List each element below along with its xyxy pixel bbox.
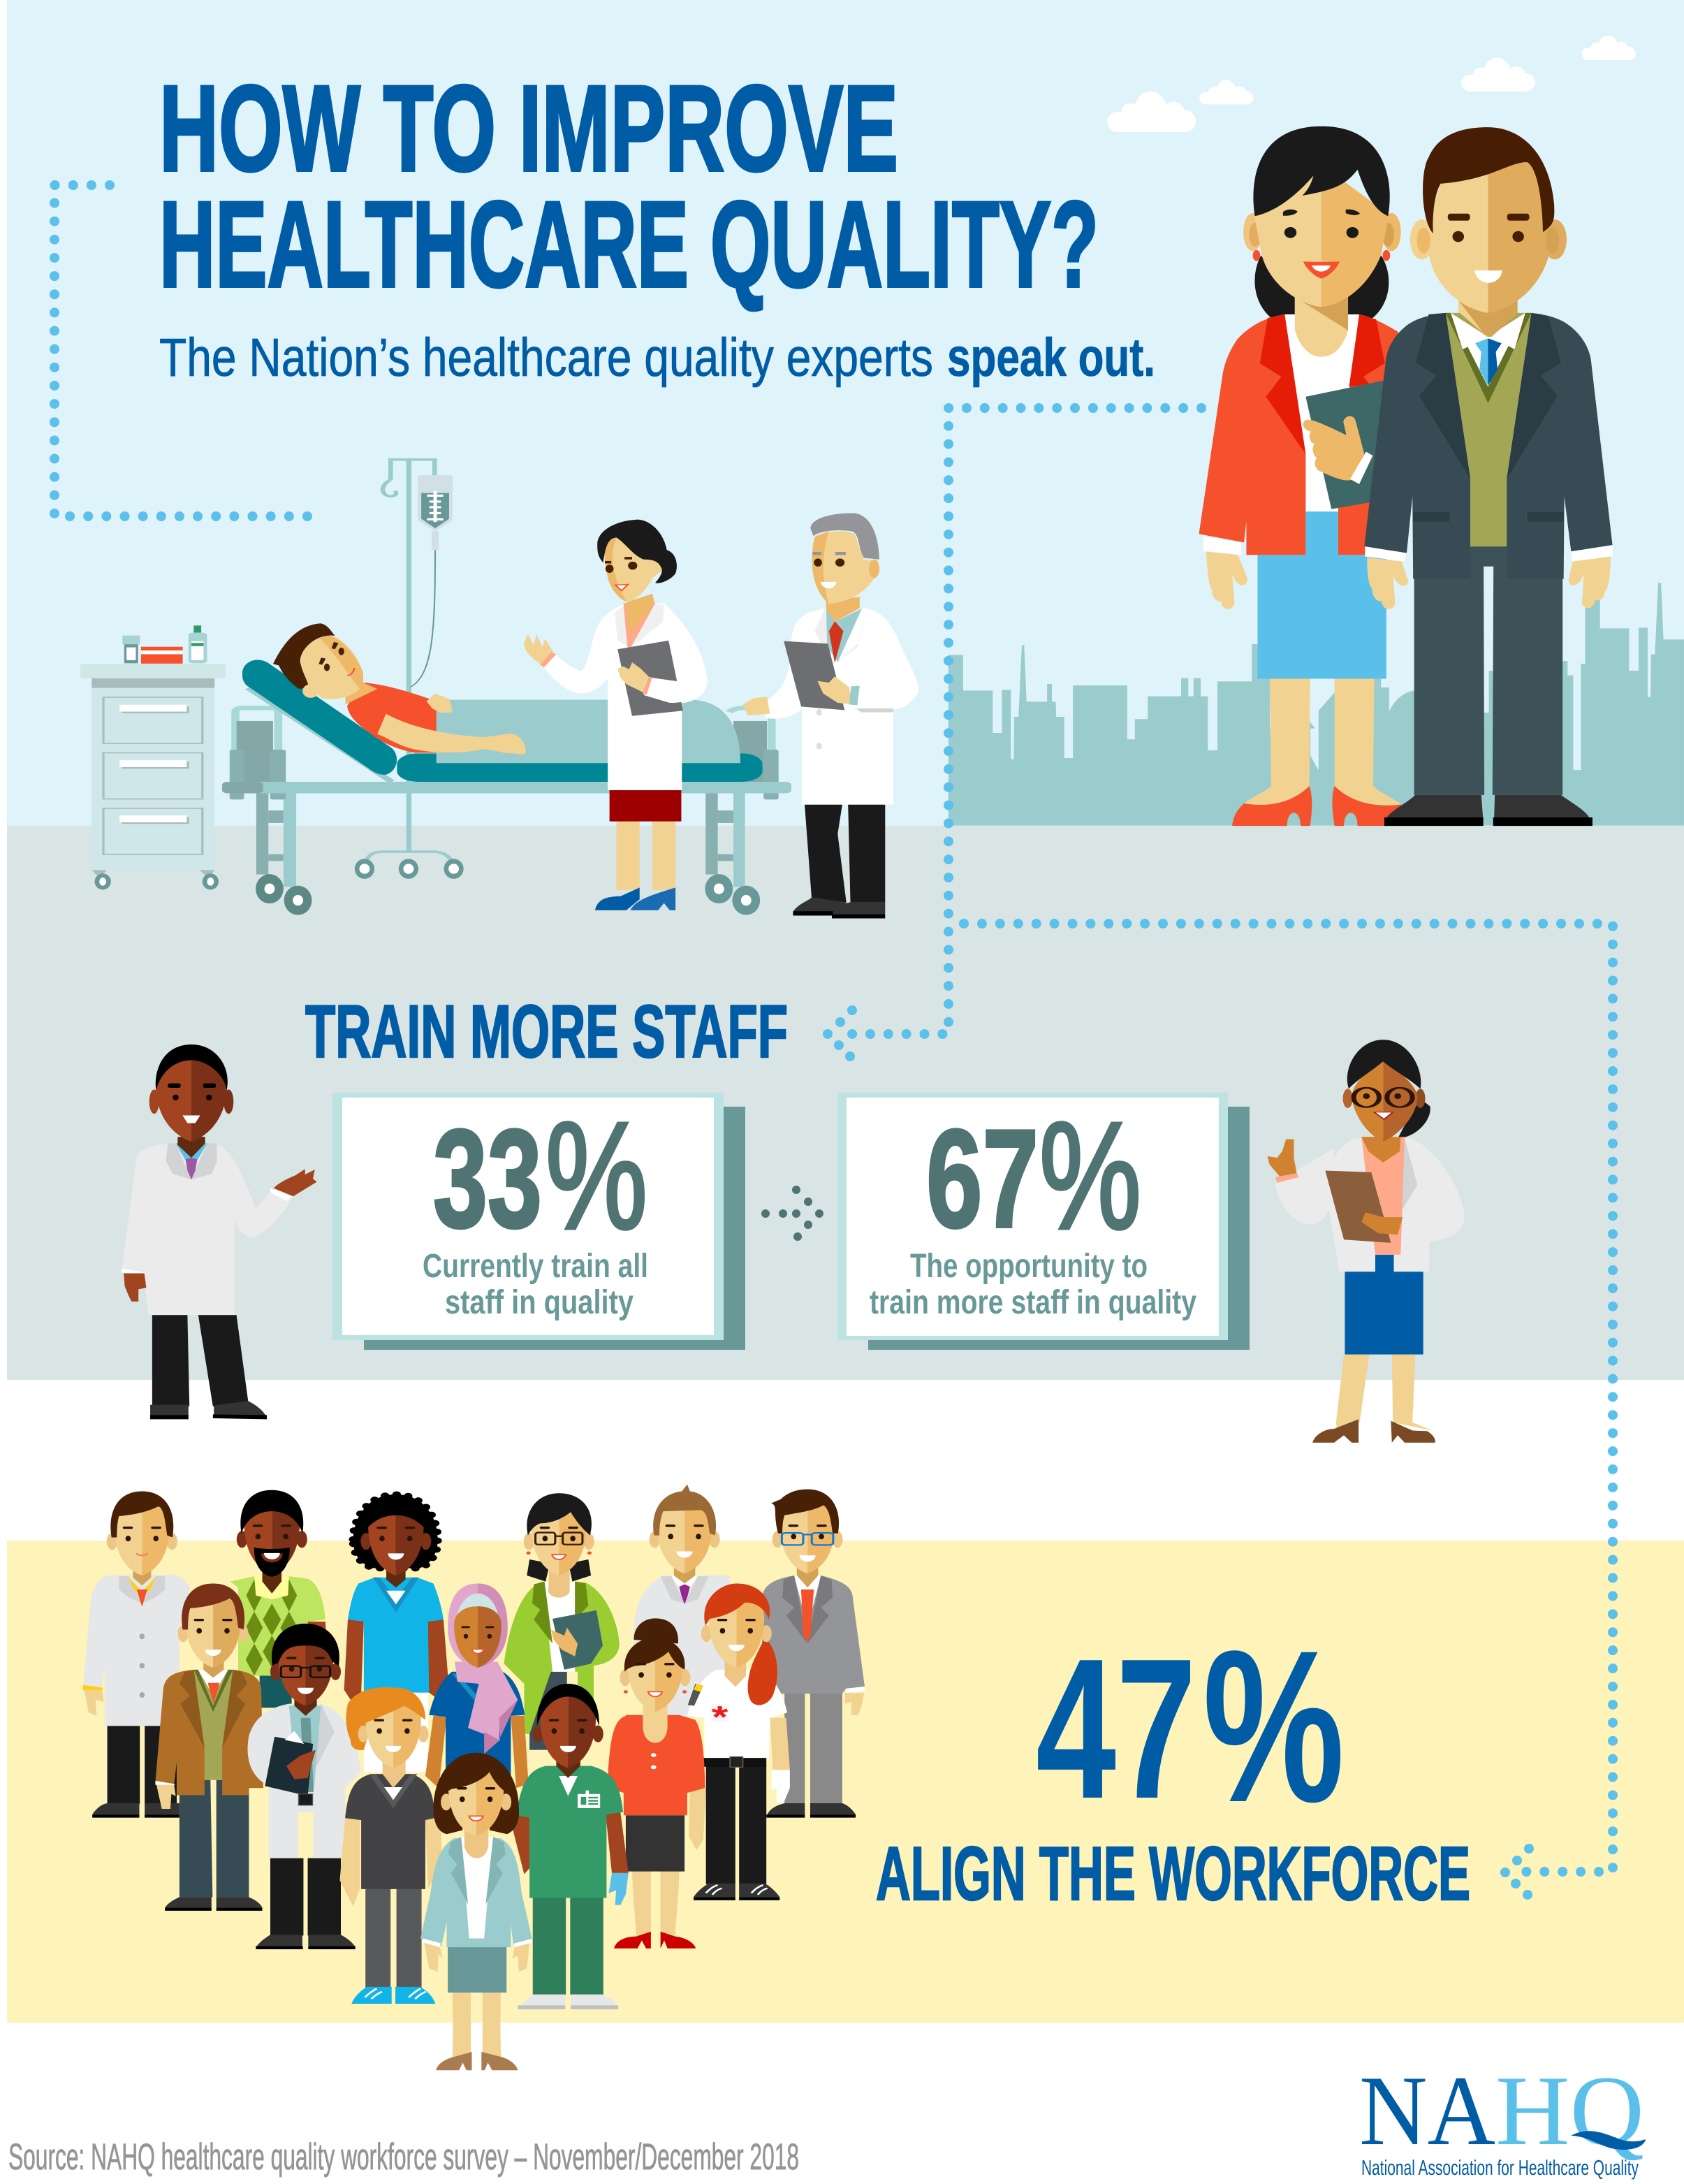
person: argyle sweater with beard <box>230 1490 328 1708</box>
person: orange haired woman in dark scrubs <box>339 1687 441 2004</box>
background: grey floor band <box>7 826 1684 1380</box>
background: yellow band <box>7 1541 1684 2023</box>
woman head <box>1243 126 1401 307</box>
statistic: 47%: % <box>1203 1605 1345 1847</box>
subtitle: speak out. <box>947 328 1155 388</box>
stat card: 67%: % <box>1039 1091 1141 1261</box>
hospital bed <box>222 660 791 915</box>
stat card: 33%: % <box>546 1091 647 1261</box>
stat card: 67%: train more staff in quality <box>870 1284 1196 1321</box>
title <box>159 61 1099 313</box>
illustration: healthcare workforce group <box>82 1485 865 2070</box>
illustration: quality experts couple <box>1199 126 1613 826</box>
person: green jacket woman with glasses <box>504 1493 620 1750</box>
arrow: chevron to train more staff <box>823 1005 857 1061</box>
background: sky band <box>7 0 1684 826</box>
person: front woman in teal jacket <box>420 1753 532 2070</box>
title: HOW TO IMPROVE <box>159 61 898 197</box>
man head <box>1410 127 1567 313</box>
person: lab coat man with yellow collar <box>82 1491 190 1818</box>
male doctor <box>742 514 918 919</box>
stat card: 67% <box>837 1091 1250 1350</box>
illustration: hospital scene <box>80 460 918 919</box>
dotted path: to align the workforce <box>964 924 1613 1872</box>
person: woman in hijab <box>425 1583 529 1788</box>
clouds <box>1107 36 1636 132</box>
title: HEALTHCARE QUALITY? <box>159 177 1099 313</box>
statistic: 47% <box>1036 1605 1345 1847</box>
person: lab coat man with purple tie <box>634 1485 730 1716</box>
illustration: female doctor with glasses <box>1268 1040 1465 1443</box>
subtitle: The Nation’s healthcare quality experts <box>159 328 933 388</box>
source note: Source: NAHQ healthcare quality workforce survey – November/December 2018 <box>8 2136 799 2178</box>
statistic: 47%: 47 <box>1036 1617 1196 1840</box>
logo: NAHQ: NA <box>1359 2055 1495 2166</box>
dotted path: from experts to train more staff <box>852 408 1201 1034</box>
stat card: 33%: 33 <box>433 1101 542 1257</box>
person: grey suit with blue glasses <box>762 1490 865 1818</box>
illustration: male doctor presenting <box>122 1044 317 1419</box>
stat card: 33%: Currently train all <box>423 1248 648 1285</box>
city skyline <box>949 583 1684 826</box>
woman in red jacket <box>1199 126 1402 826</box>
logo: NAHQ: HQ <box>1495 2055 1644 2166</box>
medicine cabinet <box>80 625 226 889</box>
stat card: 33% <box>332 1091 745 1350</box>
logo: NAHQ <box>1359 2055 1646 2180</box>
person: brown jacket man <box>155 1583 263 1911</box>
female doctor <box>524 520 708 910</box>
stat card: 33%: staff in quality <box>445 1284 634 1321</box>
person: green scrubs man <box>513 1684 629 2009</box>
IV pole and drip <box>355 460 464 879</box>
heading: train more staff: TRAIN MORE STAFF <box>305 989 788 1073</box>
person: doctor with glasses and clipboard <box>248 1624 361 1949</box>
arrow: chevron to align the workforce <box>1500 1844 1534 1900</box>
stat card: 67%: The opportunity to <box>910 1248 1148 1285</box>
person: afro woman in blue scrubs <box>344 1494 448 1772</box>
dotted path: title bracket <box>54 185 325 516</box>
patient <box>273 623 526 755</box>
person: red haired nurse <box>687 1583 790 1900</box>
dots connector between cards <box>761 1186 823 1241</box>
stat card: 67%: 67 <box>926 1101 1039 1257</box>
man in suit <box>1364 127 1613 826</box>
person: woman in orange blouse <box>608 1618 706 1949</box>
